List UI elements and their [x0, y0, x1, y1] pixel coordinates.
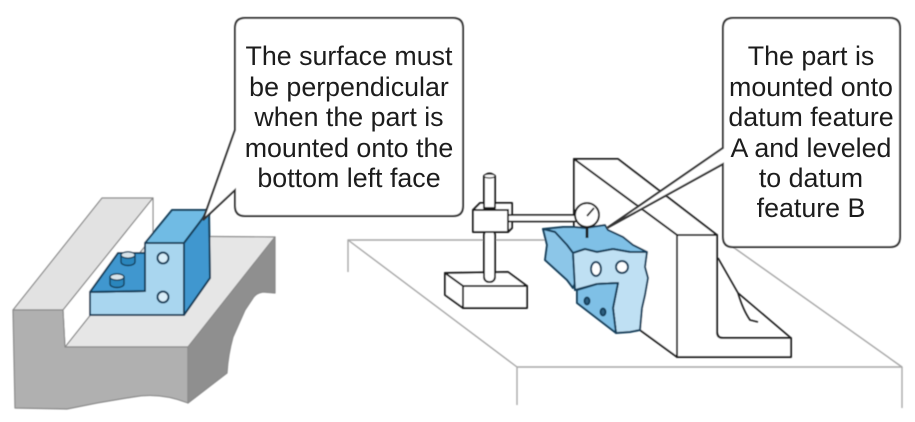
callout text: A and leveled: [731, 133, 891, 163]
blue stepped part: [90, 210, 210, 315]
peg 1: [121, 252, 135, 266]
callout text: mounted onto the: [245, 133, 453, 163]
callout text: [245, 41, 453, 193]
callout text: [728, 41, 894, 223]
callout text: to datum: [759, 163, 863, 193]
callout text: be perpendicular: [249, 72, 449, 102]
callout text: when the part is: [253, 102, 444, 132]
callout: surface must be perpendicular: [203, 18, 463, 220]
callout: part mounted onto datum feature: [607, 18, 900, 247]
blue cut-away part: [543, 225, 648, 333]
callout text: bottom left face: [257, 163, 441, 193]
surface plate outline: [348, 240, 902, 408]
panel: surface plate with indicator and angle plate: [348, 159, 902, 408]
fixture: grey L-shaped base: [13, 198, 275, 409]
part holes: [591, 262, 601, 276]
panel: left fixture with blue part: [13, 198, 275, 409]
callout text: The surface must: [245, 41, 453, 71]
peg 2: [110, 274, 124, 288]
indicator arm: [508, 215, 576, 222]
callout text: The part is: [748, 41, 874, 71]
callout text: mounted onto: [729, 72, 893, 102]
height gauge base: [445, 272, 527, 308]
bolt holes: [158, 252, 168, 264]
callout text: datum feature: [728, 102, 894, 132]
angle plate: [574, 159, 791, 357]
dial indicator: [575, 203, 599, 238]
rib edge and crack line: [718, 258, 791, 338]
callout text: feature B: [757, 193, 865, 223]
height gauge column and clamp: [473, 174, 512, 282]
